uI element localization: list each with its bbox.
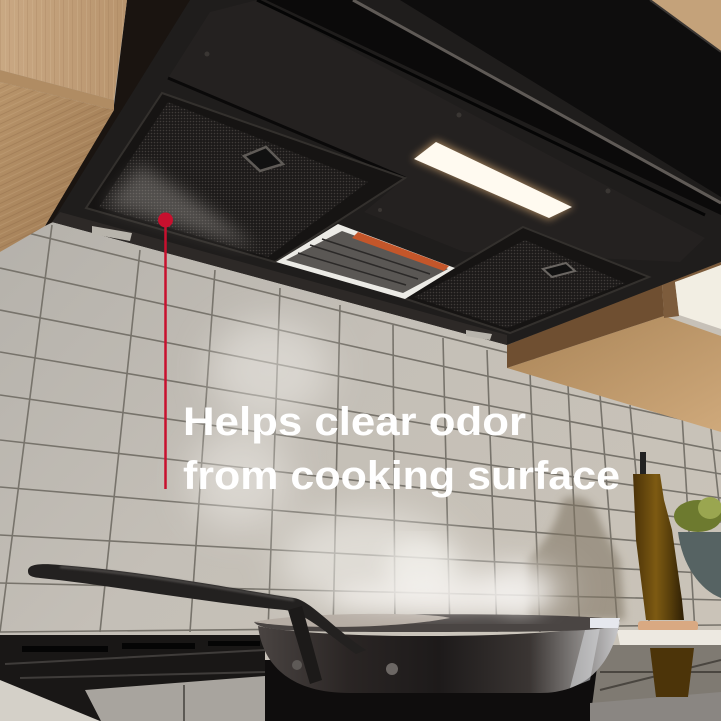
pan handle bbox=[28, 564, 398, 684]
rising steam on wall bbox=[190, 320, 570, 616]
filter pull tab bbox=[543, 263, 575, 277]
headline: Helps clear odor bbox=[183, 400, 526, 444]
bowl with greens bbox=[674, 497, 721, 598]
frying pan bbox=[28, 564, 620, 693]
top right wood cabinet bbox=[650, 0, 721, 52]
bottle bbox=[633, 452, 698, 631]
right lower cabinet bbox=[507, 262, 721, 432]
headline bbox=[183, 400, 620, 498]
callout line bbox=[158, 212, 173, 489]
headline: from cooking surface bbox=[183, 454, 620, 498]
hood clips bbox=[92, 226, 492, 340]
LED light bbox=[412, 140, 574, 220]
warning label bbox=[276, 224, 455, 299]
left upper cabinet bbox=[0, 0, 195, 252]
panel screws bbox=[204, 52, 610, 212]
left grease filter bbox=[86, 93, 405, 262]
filter pull tab bbox=[244, 147, 283, 171]
bottle shadow on wall bbox=[528, 497, 625, 620]
right grease filter bbox=[403, 227, 649, 333]
bottle base pad bbox=[638, 621, 698, 631]
pan steam bbox=[330, 539, 550, 616]
range hood bbox=[52, 0, 721, 345]
countertop and cooktop bbox=[0, 630, 721, 721]
